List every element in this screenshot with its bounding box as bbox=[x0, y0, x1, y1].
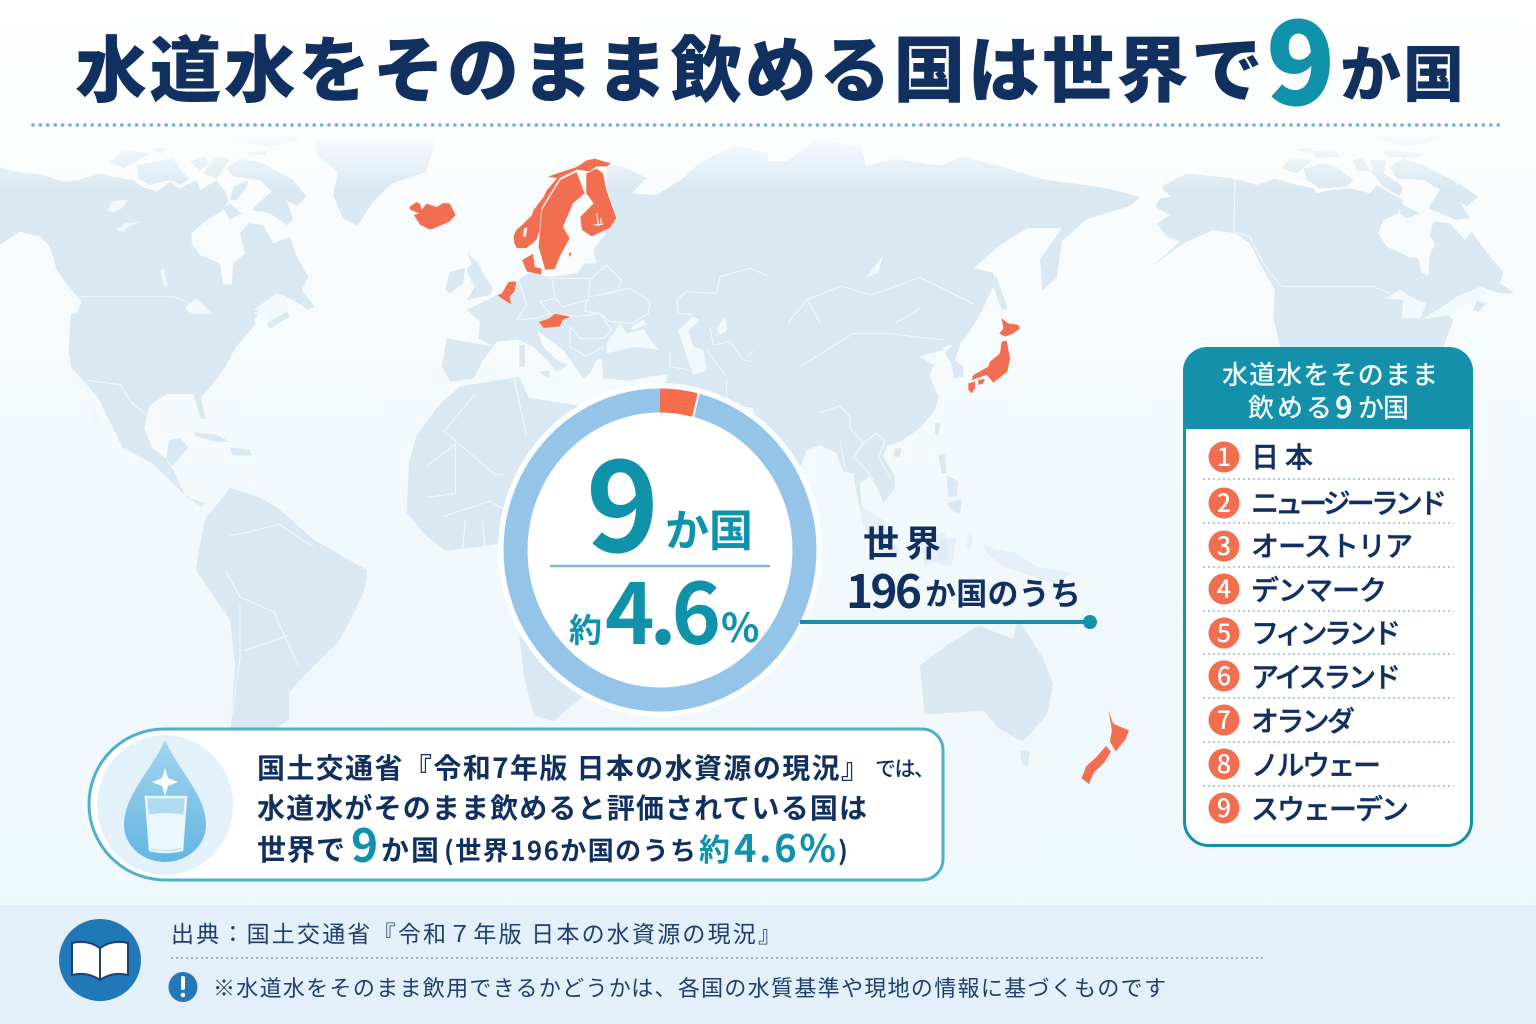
explanation text line 1: 国土交通省『令和7年版 日本の水資源の現況』 bbox=[257, 747, 869, 787]
explanation text line 3: 約 bbox=[699, 825, 730, 870]
list header bbox=[1183, 347, 1473, 429]
list rows: アイスランド bbox=[1251, 656, 1401, 696]
highlighted country: japan bbox=[968, 318, 1020, 393]
donut big number: 9 bbox=[586, 408, 659, 588]
list header: 水道水をそのまま bbox=[1222, 355, 1438, 392]
explanation text line 3: か国 bbox=[381, 829, 439, 869]
list rows: ニュージーランド bbox=[1251, 482, 1447, 522]
land: greenland, mexico, south america, africa, northern russia bbox=[69, 140, 768, 730]
list rows: デンマーク bbox=[1251, 569, 1387, 609]
list rows: 5 bbox=[1217, 614, 1231, 650]
highlighted countries: iceland, nordics, netherlands, austria bbox=[409, 158, 617, 328]
callout: world 196 countries: か国のうち bbox=[925, 569, 1081, 614]
list rows: 3 bbox=[1217, 527, 1231, 563]
donut percentage: % bbox=[721, 596, 760, 654]
list rows bbox=[1203, 436, 1454, 828]
list rows: オランダ bbox=[1251, 700, 1355, 740]
note text: ※水道水をそのまま飲用できるかどうかは、各国の水質基準や現地の情報に基づくものです bbox=[213, 971, 1166, 1003]
donut highlighted segment bbox=[660, 388, 698, 417]
list rows: 日本 bbox=[1251, 436, 1313, 476]
donut chart: 9 of 196 countries: か国 bbox=[665, 495, 753, 559]
list header: 飲める bbox=[1248, 388, 1332, 425]
land: alaska, canada and usa, east side bbox=[1152, 135, 1515, 347]
list header: 9 bbox=[1335, 383, 1353, 427]
explanation text line 3 bbox=[257, 810, 848, 876]
donut chart: 9 of 196 countries bbox=[498, 383, 822, 717]
explanation text line 3: 世界で bbox=[257, 827, 345, 869]
icon: book bbox=[59, 919, 141, 1001]
list rows: 1 bbox=[1217, 438, 1231, 474]
donut percentage bbox=[569, 548, 760, 669]
icon: exclamation bbox=[168, 972, 198, 1002]
world map bbox=[0, 128, 1536, 784]
source text: 出典：国土交通省『令和７年版 日本の水資源の現況』 bbox=[171, 915, 781, 949]
list rows: オーストリア bbox=[1251, 525, 1413, 565]
list rows: スウェーデン bbox=[1251, 788, 1409, 828]
panel: list of nine countries bbox=[1183, 347, 1473, 846]
list rows: 2 bbox=[1217, 484, 1231, 520]
list rows: 9 bbox=[1217, 789, 1231, 825]
explanation text line 3: 9 bbox=[351, 810, 378, 876]
panel: explanation callout bbox=[89, 729, 943, 880]
list rows: ノルウェー bbox=[1251, 744, 1381, 784]
explanation text line 3: (世界196か国のうち bbox=[444, 831, 696, 868]
icon: water drop with glass bbox=[97, 735, 233, 875]
callout: world 196 countries: 196 bbox=[846, 556, 922, 622]
donut percentage: 約 bbox=[569, 604, 602, 652]
list header: か国 bbox=[1358, 388, 1409, 425]
explanation text line 3: 4.6% bbox=[734, 818, 836, 873]
title: 水道水をそのまま飲める国は世界で bbox=[75, 12, 1263, 117]
explanation text line 1: では、 bbox=[875, 753, 935, 783]
list rows: フィンランド bbox=[1251, 612, 1401, 652]
explanation text line 2: 水道水がそのまま飲めると評価されている国は bbox=[257, 787, 867, 827]
land: siberia, kamchatka, alaska strait bbox=[767, 139, 1140, 766]
title bbox=[75, 0, 1464, 138]
land: europe and middle east bbox=[442, 237, 771, 410]
list rows: 8 bbox=[1217, 745, 1231, 781]
callout: world 196 countries bbox=[800, 515, 1097, 629]
list rows: 6 bbox=[1217, 657, 1231, 693]
map top fade bbox=[0, 128, 1536, 190]
land: china, southeast asia, islands bbox=[753, 323, 1073, 583]
highlighted country: new zealand bbox=[1081, 710, 1129, 784]
callout: world 196 countries: 世界 bbox=[863, 515, 941, 567]
title: か国 bbox=[1340, 25, 1464, 114]
list rows: 7 bbox=[1217, 701, 1231, 737]
donut percentage: 4.6 bbox=[605, 548, 721, 669]
list rows: 4 bbox=[1217, 570, 1231, 606]
panel: footer source bbox=[0, 905, 1536, 1024]
explanation text line 3: ) bbox=[838, 831, 848, 868]
land: canada and northern usa, west side bbox=[0, 135, 315, 350]
